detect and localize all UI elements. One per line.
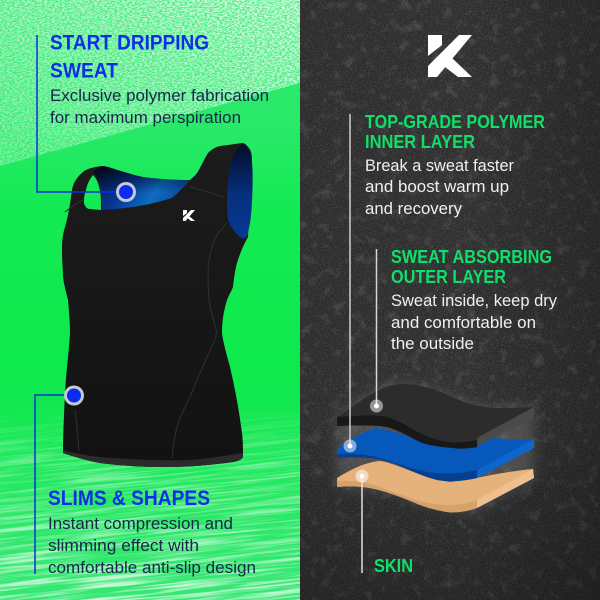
body text: comfortable anti-slip design: [48, 559, 256, 577]
leader: skin: [356, 470, 368, 573]
label: skin: SKIN: [374, 555, 413, 576]
heading: [365, 111, 545, 152]
panel: dark textured background: [300, 0, 600, 600]
heading: START DRIPPING: [50, 32, 209, 54]
heading: TOP-GRADE POLYMER: [365, 111, 545, 132]
neck opening showing background: [84, 175, 101, 210]
vest chest logo: [183, 210, 195, 221]
body text: Instant compression and: [48, 515, 233, 533]
vest: [62, 143, 253, 467]
leader line: [35, 395, 66, 574]
glow behind layers: [337, 384, 534, 510]
black layer: [337, 384, 534, 449]
panel: green background: [0, 0, 300, 600]
body text: Sweat inside, keep dry: [391, 292, 558, 310]
blue layer: [337, 428, 534, 481]
fabric layers diagram: [337, 384, 534, 512]
vest body: [62, 143, 252, 467]
body text: and boost warm up: [365, 178, 509, 196]
body text: for maximum perspiration: [50, 109, 241, 127]
inner blue back panel: [93, 166, 190, 210]
text block: sweat absorbing outer layer: [391, 246, 558, 353]
body text: [50, 87, 269, 127]
body text: and recovery: [365, 200, 463, 218]
vest hem band: [63, 450, 243, 467]
body text: [391, 292, 558, 353]
heading: SWEAT: [50, 60, 118, 82]
callout: start dripping sweat: [37, 32, 269, 202]
text block: top-grade polymer inner layer: [365, 111, 545, 218]
heading: SLIMS & SHAPES: [48, 487, 210, 510]
heading: INNER LAYER: [365, 131, 475, 152]
body text: [365, 157, 514, 218]
body text: and comfortable on: [391, 314, 536, 332]
heading: OUTER LAYER: [391, 266, 506, 287]
icon: brand logo: [428, 35, 472, 77]
body text: slimming effect with: [48, 537, 199, 555]
body text: Break a sweat faster: [365, 157, 514, 175]
body text: Exclusive polymer fabrication: [50, 87, 269, 105]
right armhole lining: [227, 144, 253, 239]
vest seams: [65, 187, 227, 458]
heading: [50, 32, 209, 82]
body text: the outside: [391, 335, 474, 353]
marker dot: [116, 182, 136, 202]
leader: outer layer: [370, 249, 383, 412]
heading: SWEAT ABSORBING: [391, 246, 552, 267]
heading: [391, 246, 552, 287]
marker dot: [64, 386, 84, 406]
callout: slims and shapes: [35, 386, 256, 577]
body text: [48, 515, 256, 577]
leader line: [37, 35, 118, 192]
skin layer: [337, 461, 534, 512]
inner panel shadow: [93, 166, 190, 210]
leader: inner layer: [344, 114, 356, 452]
